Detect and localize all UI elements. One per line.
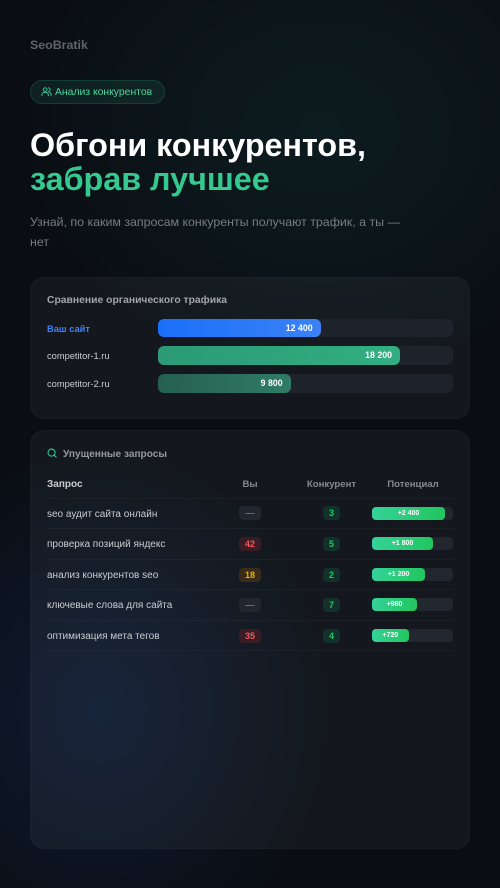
title: Обгони конкурентов, bbox=[30, 126, 366, 162]
query: оптимизация мета тегов bbox=[47, 630, 160, 642]
column: competitor: Конкурент bbox=[307, 478, 356, 490]
potential bar: +2 400 bbox=[398, 510, 419, 516]
row 3 bbox=[47, 568, 453, 582]
position: competitor: 2 bbox=[329, 570, 334, 580]
query: seo аудит сайта онлайн bbox=[47, 508, 157, 520]
potential bar bbox=[372, 537, 453, 550]
potential bar bbox=[372, 628, 453, 642]
bar: competitor 2 bbox=[158, 374, 453, 393]
column: potential: Потенциал bbox=[387, 478, 439, 490]
label: your site: Ваш сайт bbox=[47, 324, 90, 334]
title bbox=[30, 126, 366, 197]
position: competitor: 5 bbox=[329, 539, 334, 549]
position: you bbox=[239, 537, 261, 551]
position: you: 42 bbox=[245, 539, 255, 549]
position: you bbox=[239, 628, 261, 642]
position: you bbox=[239, 598, 261, 612]
position: competitor bbox=[323, 506, 340, 520]
row 5 bbox=[47, 629, 453, 643]
row 4 bbox=[47, 598, 453, 612]
potential bar bbox=[372, 598, 453, 611]
position: competitor bbox=[323, 628, 340, 642]
position: competitor bbox=[323, 537, 340, 551]
subtitle bbox=[30, 215, 400, 249]
potential bar: +1 200 bbox=[388, 570, 409, 578]
heading: missed queries: Упущенные запросы bbox=[63, 448, 167, 460]
position: you: 35 bbox=[245, 630, 255, 640]
icon: users bbox=[41, 87, 52, 96]
position: competitor bbox=[323, 598, 340, 612]
query: ключевые слова для сайта bbox=[47, 600, 172, 611]
heading: traffic comparison: Сравнение органического трафика bbox=[47, 295, 227, 306]
position: competitor: 7 bbox=[329, 600, 334, 610]
badge label: Анализ конкурентов bbox=[55, 87, 152, 98]
brand logo: SeoBratik bbox=[30, 38, 88, 52]
subtitle: нет bbox=[30, 235, 49, 249]
title: забрав лучшее bbox=[30, 161, 270, 197]
query: проверка позиций яндекс bbox=[47, 539, 165, 550]
badge: competitor analysis bbox=[30, 80, 165, 104]
position: you bbox=[239, 506, 261, 520]
panel: missed queries bbox=[30, 430, 470, 849]
bar: your site bbox=[158, 319, 453, 337]
table header bbox=[47, 478, 439, 490]
potential bar bbox=[372, 568, 453, 580]
row 2 bbox=[47, 537, 453, 551]
potential bar: +1 800 bbox=[392, 540, 413, 547]
position: competitor: 3 bbox=[329, 508, 334, 518]
potential bar: +980 bbox=[387, 601, 402, 608]
icon: search bbox=[48, 448, 57, 458]
position: competitor: 4 bbox=[329, 630, 334, 640]
position: you: 18 bbox=[245, 570, 255, 580]
row 1 bbox=[47, 506, 453, 520]
bar: competitor 1 bbox=[158, 346, 453, 365]
position: you: — bbox=[246, 508, 254, 518]
label: competitor 1: competitor-1.ru bbox=[47, 351, 110, 361]
position: you: — bbox=[246, 600, 254, 610]
subtitle: Узнай, по каким запросам конкуренты получают трафик, а ты — bbox=[30, 215, 400, 229]
bar: your site: 12 400 bbox=[286, 323, 313, 333]
column: you: Вы bbox=[242, 478, 258, 490]
panel: traffic comparison bbox=[30, 277, 470, 419]
column: query: Запрос bbox=[47, 478, 83, 490]
position: you bbox=[239, 568, 261, 582]
bar: competitor 1: 18 200 bbox=[365, 350, 392, 360]
position: competitor bbox=[323, 568, 340, 582]
bar: competitor 2: 9 800 bbox=[261, 378, 283, 388]
potential bar bbox=[372, 506, 453, 520]
label: competitor 2: competitor-2.ru bbox=[47, 378, 110, 388]
potential bar: +720 bbox=[382, 632, 398, 638]
query: анализ конкурентов seo bbox=[47, 570, 158, 580]
